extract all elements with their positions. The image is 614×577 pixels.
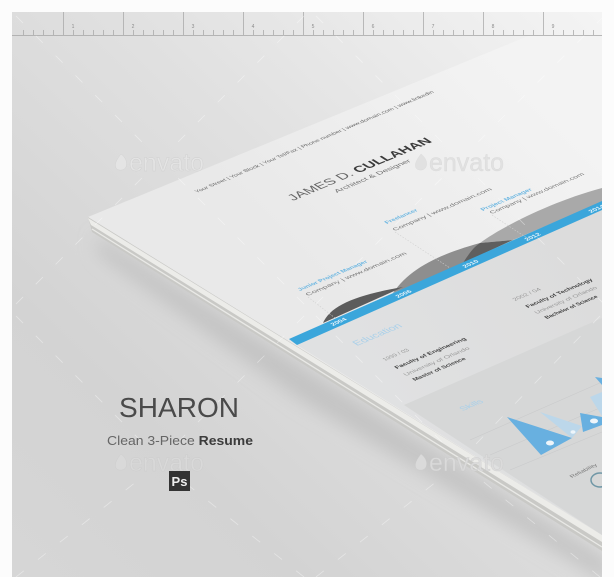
watermark: envato top left — [116, 154, 203, 171]
skills chart — [470, 377, 602, 470]
job: freelancer: Company | www.domain.com — [391, 187, 494, 232]
timeline hills — [323, 188, 602, 323]
education entry two: Bachelor of Science — [543, 295, 600, 320]
education entry one: University of Orlando — [402, 346, 472, 377]
icon: photoshop badge: Ps — [172, 474, 187, 489]
skills heading: Skills — [457, 398, 486, 412]
year labels: 2014 — [587, 204, 607, 214]
education entry two: 2002 / 04 — [511, 287, 544, 302]
education entry one: 1999 / 03 — [381, 348, 412, 362]
paper shadow — [95, 235, 610, 577]
ruler: 2 — [132, 24, 135, 30]
year labels — [329, 204, 607, 327]
lower section background — [289, 205, 602, 535]
job title: Architect & Designer — [332, 158, 414, 194]
name: JAMES D. CULLAHAN — [284, 136, 435, 202]
ruler: 8 — [492, 24, 495, 30]
reliability ring — [590, 472, 602, 488]
sheet top surface — [88, 94, 556, 506]
watermark: envato bottom right: envato — [429, 449, 504, 477]
job: project manager: Company | www.domain.com — [488, 172, 586, 215]
year labels: 2012 — [523, 232, 543, 242]
reliability label: Reliability — [569, 463, 600, 479]
education entry one — [381, 337, 472, 382]
watermark: envato top left: envato — [129, 149, 204, 177]
job: junior project manager: Junior Project Manager — [296, 259, 370, 292]
watermark: envato — [115, 149, 504, 477]
job: freelancer: Freelancer — [383, 208, 420, 225]
paper stack edge — [88, 217, 602, 551]
education entry one: Master of Science — [411, 357, 468, 382]
contact line: Your Street | Your Block | Your Tel/Fax | Phone number | www.domain.com | www.linkedin — [194, 90, 436, 194]
education entry one: Faculty of Engineering — [393, 337, 469, 370]
ruler: 5 — [312, 24, 315, 30]
resume sheet — [88, 91, 602, 534]
skills section background — [404, 364, 596, 528]
ruler: 1 — [72, 24, 75, 30]
job: junior project manager: Company | www.domain.com — [304, 251, 409, 297]
education entry two: University of Orlando — [533, 286, 600, 315]
year labels: 2006 — [394, 289, 414, 299]
job: junior project manager — [296, 251, 409, 297]
ruler: 7 — [432, 24, 435, 30]
watermark: envato top right — [415, 154, 503, 172]
watermark: envato bottom left: envato — [129, 449, 204, 477]
education heading: Education — [350, 322, 405, 347]
title: SHARON — [119, 392, 239, 423]
year labels: 2004 — [329, 317, 349, 327]
subtitle: Clean 3-Piece Resume — [107, 433, 253, 448]
education entry two — [511, 278, 600, 320]
watermark: envato bottom right — [416, 454, 502, 472]
education entry two: Faculty of Technology — [524, 278, 595, 309]
icon: photoshop badge — [169, 471, 190, 491]
ruler: 9 — [552, 24, 555, 30]
dotted timeline connectors — [308, 215, 530, 318]
year labels: 2010 — [461, 259, 481, 269]
ruler: 3 — [192, 24, 195, 30]
timeline band — [289, 201, 602, 345]
watermark: envato top right: envato — [429, 149, 504, 177]
ruler: 4 — [252, 24, 255, 30]
job: freelancer — [383, 187, 494, 232]
job: project manager: Project Manager — [479, 187, 535, 212]
ruler — [12, 12, 602, 36]
ruler: 6 — [372, 24, 375, 30]
